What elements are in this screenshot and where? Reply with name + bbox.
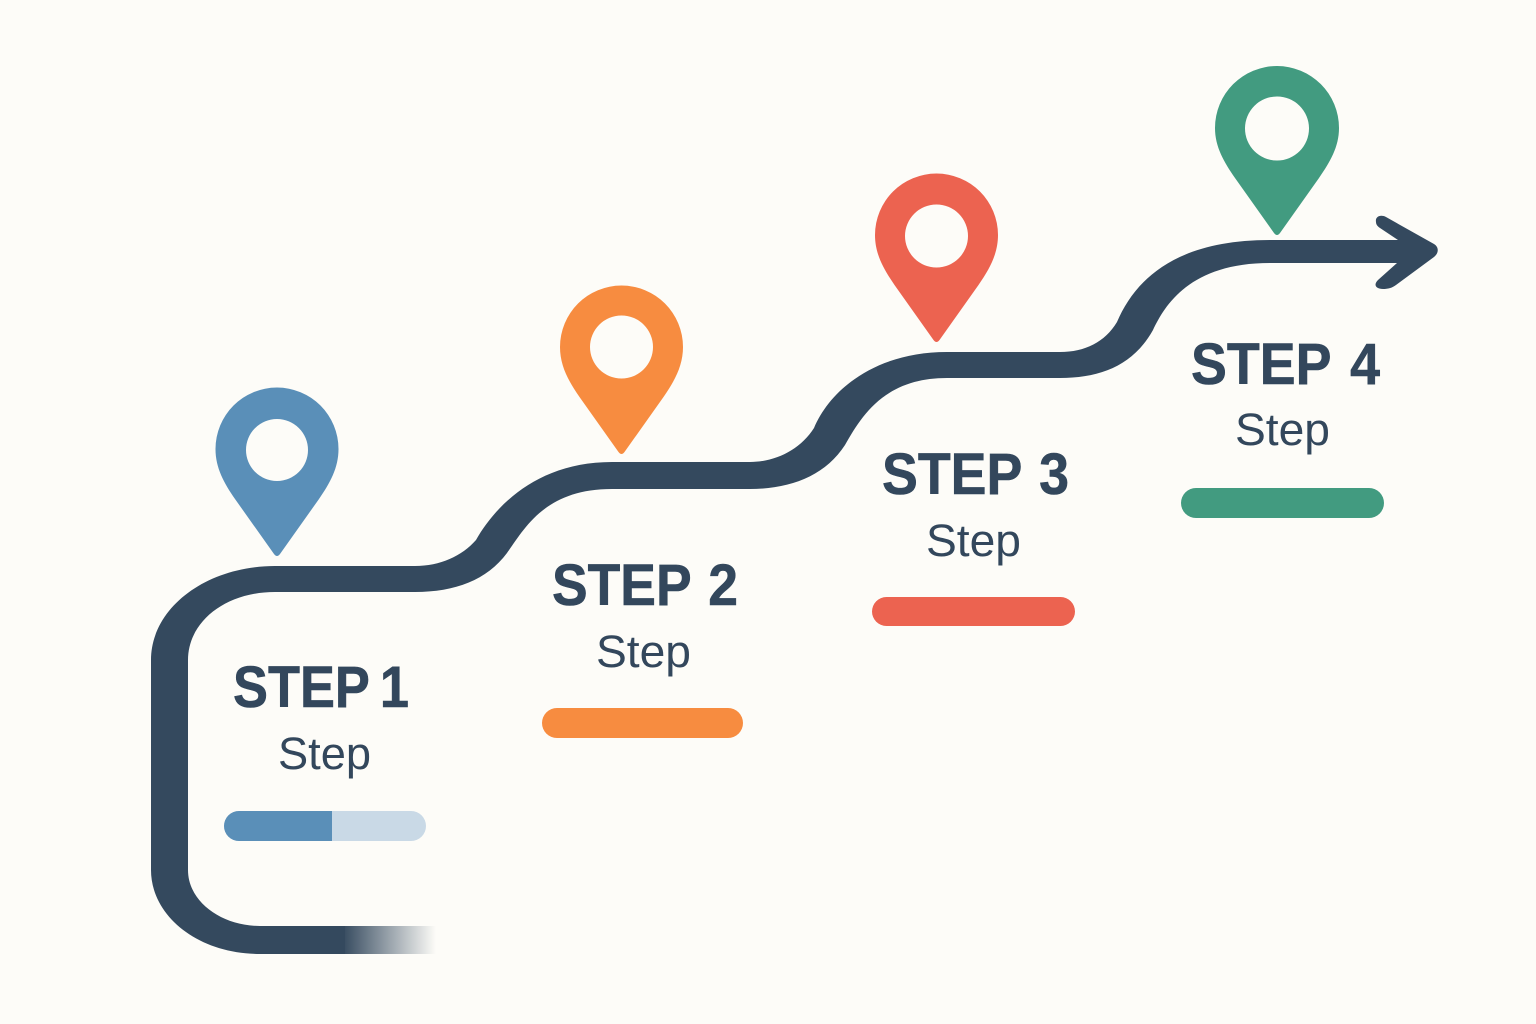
winding road with arrowhead — [151, 216, 1438, 954]
step 4 label group — [1181, 332, 1384, 518]
step 2 progress bar — [542, 708, 743, 738]
step 3 subtitle: Step — [926, 515, 1021, 566]
step 1 label group — [224, 655, 426, 841]
step 3 label group — [872, 442, 1075, 626]
step 2 heading: STEP 2 — [552, 553, 738, 618]
step 4 heading: STEP 4 — [1191, 332, 1380, 397]
pin: step 2 orange — [560, 286, 683, 454]
step 1 heading: STEP 1 — [233, 655, 409, 720]
step 2 label group — [542, 553, 743, 738]
pin: step 1 blue — [216, 388, 338, 556]
step 3 heading: STEP 3 — [882, 442, 1069, 507]
step 4 progress bar — [1181, 488, 1384, 518]
pin: step 3 red — [875, 174, 998, 342]
step 1 progress bar — [224, 811, 426, 841]
step 2 subtitle: Step — [596, 626, 691, 677]
road fading tail — [344, 926, 436, 954]
pin: step 4 green — [1215, 66, 1339, 235]
step 1 subtitle: Step — [278, 728, 371, 779]
step 4 subtitle: Step — [1235, 404, 1330, 455]
step 3 progress bar — [872, 597, 1075, 626]
